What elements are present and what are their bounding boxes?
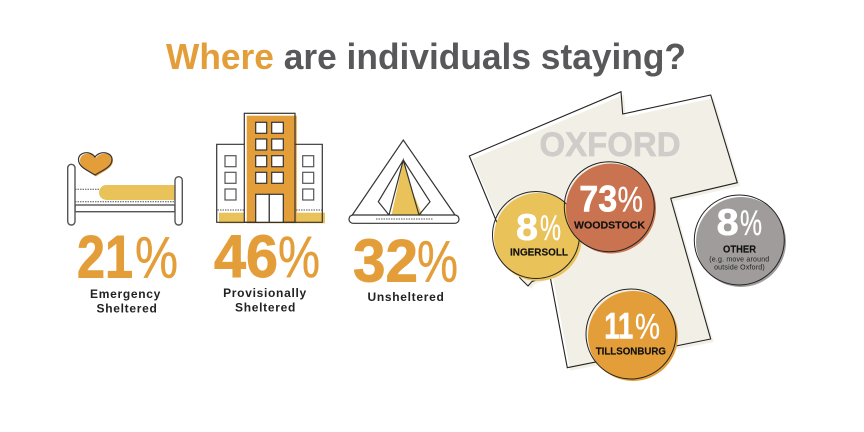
label: provisionally sheltered: Provisionally (223, 286, 307, 300)
panel: emergency sheltered (68, 153, 182, 316)
percentage: 21%: % (135, 226, 178, 290)
bubble: Ingersoll: % (540, 209, 561, 248)
label: emergency sheltered: Emergency (90, 287, 161, 301)
percentage: 32%: % (417, 230, 458, 294)
bubble: Tillsonburg: % (635, 307, 660, 346)
panel: provisionally sheltered (214, 113, 325, 314)
panel: unsheltered (349, 140, 459, 304)
bubble: Other: 8 (717, 202, 739, 243)
bubble: Tillsonburg: TILLSONBURG (596, 345, 666, 357)
bubble: Other (694, 195, 786, 287)
bubble: Woodstock: WOODSTOCK (574, 219, 645, 231)
panel: Oxford map (469, 92, 786, 381)
icon: tent (349, 140, 459, 223)
percentage: 32%: 32 (353, 228, 418, 294)
bubble: Ingersoll (492, 192, 582, 281)
map label: Oxford: OXFORD (540, 126, 680, 164)
bubble: Tillsonburg (586, 289, 678, 381)
bubble: Woodstock: % (618, 181, 643, 220)
bubble: Ingersoll: INGERSOLL (510, 247, 569, 259)
bubble: Other: OTHER (723, 243, 756, 255)
icon: bed with heart (68, 153, 182, 225)
percentage: 46%: 46 (214, 223, 278, 290)
percentage: 21% (77, 224, 178, 290)
bubble: Woodstock (564, 162, 656, 254)
label: unsheltered: Unsheltered (367, 290, 445, 304)
bubble: Other: outside Oxford) (714, 264, 765, 271)
percentage: 21%: 21 (77, 224, 133, 290)
bubble: Tillsonburg: 11 (604, 305, 633, 346)
label: provisionally sheltered: Sheltered (235, 300, 296, 314)
percentage: 32% (353, 228, 458, 294)
bubble: Other: % (740, 204, 762, 243)
bubble: Ingersoll: 8 (516, 207, 538, 248)
label: emergency sheltered: Sheltered (96, 302, 158, 316)
title: Where are individuals staying? (166, 36, 686, 77)
bubble: Other: (e.g. move around (709, 257, 769, 264)
map: county shape (469, 92, 740, 371)
bubble: Woodstock: 73 (579, 179, 617, 220)
percentage: 46% (214, 223, 320, 290)
icon: apartment building (217, 113, 325, 223)
percentage: 46%: % (278, 225, 320, 290)
